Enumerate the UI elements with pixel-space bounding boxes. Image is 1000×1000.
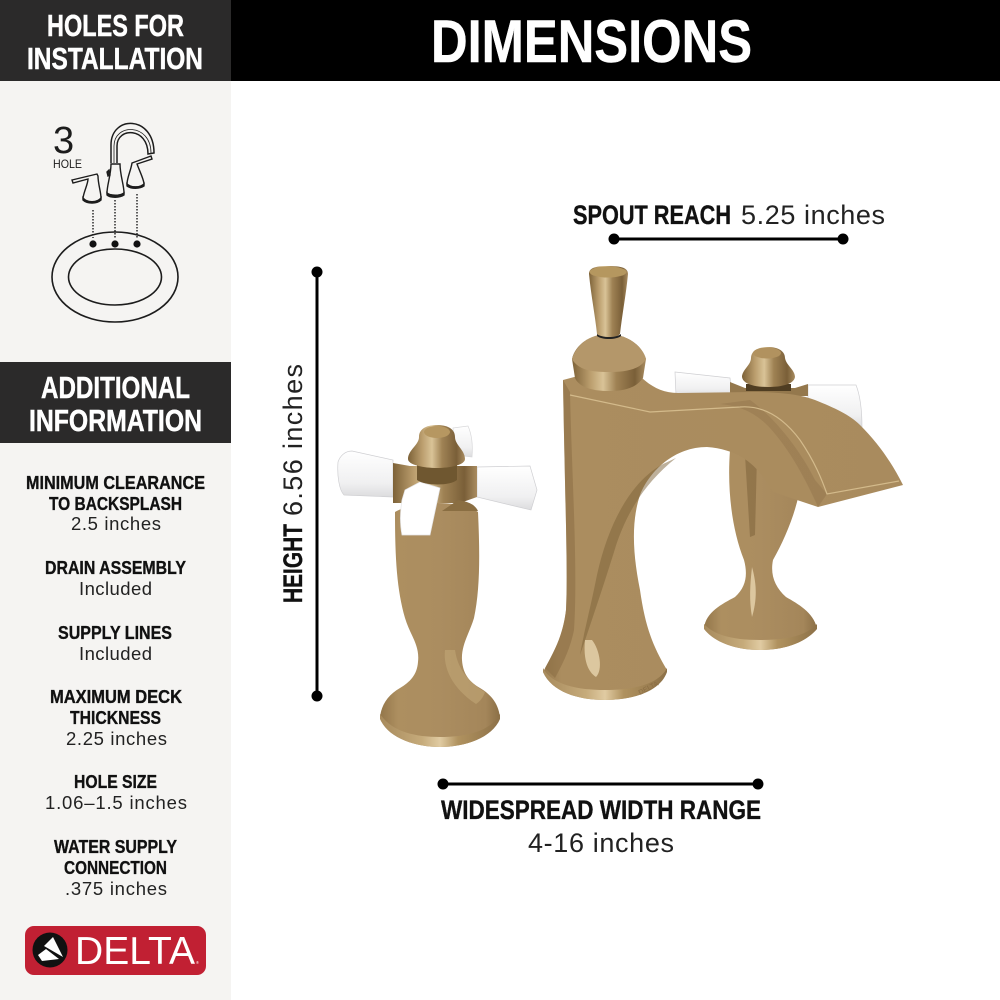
spec: drain assembly: DRAIN ASSEMBLY	[45, 557, 187, 578]
spec: drain assembly	[45, 557, 187, 599]
icon: three hole faucet and sink diagram: HOLE	[53, 157, 82, 171]
spec: water supply connection	[54, 836, 178, 899]
heading: additional information: INFORMATION	[29, 403, 202, 438]
spec: minimum clearance	[26, 472, 205, 534]
dimension: height: 6.56 inches	[278, 364, 308, 516]
spec: maximum deck thickness: THICKNESS	[70, 707, 161, 728]
dimension: widespread width range	[438, 778, 764, 858]
faucet: pop-up knob and collar	[572, 266, 646, 391]
spec: water supply connection: WATER SUPPLY	[54, 836, 178, 857]
heading: holes for installation: HOLES FOR	[47, 8, 184, 43]
spec: maximum deck thickness	[50, 686, 183, 749]
dimension: spout reach	[573, 200, 885, 244]
logo: delta	[25, 926, 206, 975]
spec: supply lines	[58, 622, 172, 664]
heading: holes for installation: INSTALLATION	[27, 41, 203, 76]
title banner: dimensions	[231, 0, 1000, 81]
spec: maximum deck thickness: 2.25 inches	[66, 728, 167, 749]
heading: additional information: ADDITIONAL	[41, 370, 190, 405]
spec: hole size: 1.06–1.5 inches	[45, 792, 187, 813]
dimension: widespread width range: WIDESPREAD WIDTH RANGE	[441, 795, 761, 825]
logo: delta: ®	[196, 960, 199, 965]
spec: supply lines: SUPPLY LINES	[58, 622, 172, 643]
faucet: left cross handle	[338, 425, 537, 747]
spec: water supply connection: CONNECTION	[64, 857, 167, 878]
faucet: main spout body: DELTA	[638, 680, 660, 697]
heading: additional information	[0, 362, 231, 443]
dimension: spout reach: SPOUT REACH	[573, 200, 731, 230]
icon: three hole faucet and sink diagram: 3	[53, 120, 74, 162]
title banner: dimensions: DIMENSIONS	[431, 8, 752, 75]
dimension: spout reach: 5.25 inches	[741, 200, 885, 230]
icon: three hole faucet and sink diagram	[52, 120, 178, 322]
spec: maximum deck thickness: MAXIMUM DECK	[50, 686, 183, 707]
dimension: height	[278, 266, 322, 702]
spec: minimum clearance: TO BACKSPLASH	[49, 493, 182, 514]
logo: delta: DELTA	[75, 930, 195, 973]
spec: minimum clearance: MINIMUM CLEARANCE	[26, 472, 205, 493]
sidebar panel	[0, 0, 231, 1000]
faucet: main spout body	[543, 376, 903, 700]
faucet: right cross handle behind spout	[675, 347, 862, 650]
spec: hole size: HOLE SIZE	[74, 771, 157, 792]
dimension: widespread width range: 4-16 inches	[528, 828, 674, 858]
dimension: height: HEIGHT	[278, 524, 308, 603]
spec: water supply connection: .375 inches	[65, 878, 167, 899]
heading: holes for installation	[0, 0, 231, 81]
spec: minimum clearance: 2.5 inches	[71, 513, 161, 534]
spec: hole size	[45, 771, 187, 813]
spec: drain assembly: Included	[79, 578, 152, 599]
spec: supply lines: Included	[79, 643, 152, 664]
